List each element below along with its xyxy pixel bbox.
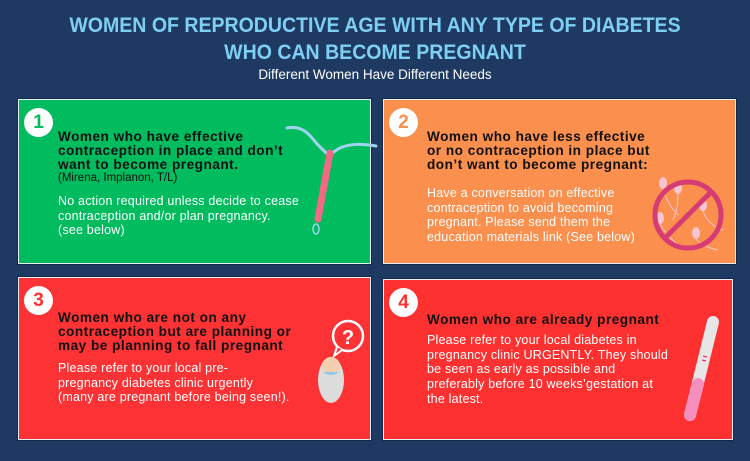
body 4: the latest. [427,392,483,406]
title [69,14,681,64]
number 4: 4 [398,292,409,313]
heading 3: Women who are not on any [58,310,246,325]
heading 3 [58,310,291,353]
icon: baby with question [318,320,364,403]
body 4: pregnancy clinic URGENTLY. They should [427,348,668,362]
heading 3: contraception but are planning or [58,324,291,339]
number 3 [24,286,53,315]
body 4: preferably before 10 weeks’gestation at [427,377,653,391]
body 1: No action required unless decide to cease [58,194,299,208]
body 1: (see below) [58,223,125,237]
body 2: Have a conversation on effective [427,186,615,200]
body 2: education materials link (See below) [427,230,635,244]
number 2 [389,108,418,137]
body 4: be seen as early as possible and [427,362,615,376]
heading 2: don’t want to become pregnant: [427,157,648,172]
body 2: pregnant. Please send them the [427,215,610,229]
heading 1: Women who have effective [58,129,244,144]
body 2 [427,186,635,244]
heading 2 [427,129,650,172]
body 4: Please refer to your local diabetes in [427,333,637,347]
title: WHO CAN BECOME PREGNANT [224,41,526,64]
panel: 1 effective contraception [18,99,371,264]
number 4 [389,288,418,317]
heading 2: Women who have less effective [427,129,645,144]
heading 2: or no contraception in place but [427,143,650,158]
body 1: contraception and/or plan pregnancy. [58,209,271,223]
body 1 [58,194,299,237]
body 3 [58,361,290,404]
title: WOMEN OF REPRODUCTIVE AGE WITH ANY TYPE OF DIABETES [69,14,681,37]
panel: 2 less effective contraception [383,99,736,264]
icon: IUD [286,126,378,235]
heading 1: contraception in place and don’t [58,143,283,158]
body 3: pregnancy diabetes clinic urgently [58,376,253,390]
heading 1 [58,129,283,172]
number 3: 3 [33,290,44,311]
number 2: 2 [398,112,409,133]
body 2: contraception to avoid becoming [427,201,613,215]
icon: no sperm [652,177,724,250]
icon: baby with question: ? [342,327,354,349]
body 3: (many are pregnant before being seen!). [58,390,290,404]
body 3: Please refer to your local pre- [58,361,228,375]
heading 4: Women who are already pregnant [427,312,659,327]
subtitle: Different Women Have Different Needs [258,67,492,82]
icon: pregnancy test [684,316,719,421]
number 1 [24,108,53,137]
panel: 3 planning pregnancy [18,277,371,440]
heading 3: may be planning to fall pregnant [58,338,283,353]
note 1: (Mirena, Implanon, T/L) [58,172,177,184]
panel: 4 already pregnant [383,279,733,440]
body 4 [427,333,668,406]
heading 1: want to become pregnant. [58,157,238,172]
number 1: 1 [33,112,44,133]
